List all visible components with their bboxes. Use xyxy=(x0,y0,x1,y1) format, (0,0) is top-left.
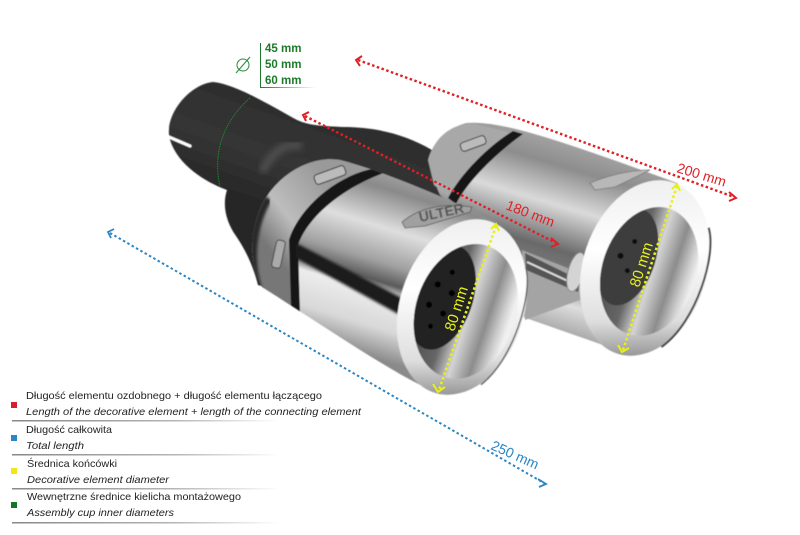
collar shadow xyxy=(253,198,268,290)
legend item: red xyxy=(11,390,362,422)
left tip tube xyxy=(252,158,498,385)
black band xyxy=(289,169,384,312)
arrow: left 80 mm xyxy=(433,224,499,392)
legend xyxy=(11,390,362,524)
legend item: blue: Total length xyxy=(26,440,84,452)
logo plates xyxy=(313,165,347,185)
legend item: red: Długość elementu ozdobnego + długość elementu łączącego xyxy=(26,390,322,402)
inlet diameters: 45 mm xyxy=(265,43,301,55)
reflection band xyxy=(296,243,405,314)
arrow: right 80 mm xyxy=(618,184,680,352)
right tip tube xyxy=(428,123,705,352)
inlet diameters: 50 mm xyxy=(265,59,301,71)
label: 180 mm: 180 mm xyxy=(504,197,557,230)
engraved logo xyxy=(402,206,472,228)
right tip face xyxy=(579,180,712,356)
label: 200 mm: 200 mm xyxy=(675,160,728,190)
arrow: 180 mm xyxy=(303,112,558,247)
left tip tube: ULTER xyxy=(417,200,465,225)
legend item: blue: Długość całkowita xyxy=(26,424,112,436)
inlet diameters: 60 mm xyxy=(265,75,301,87)
label: left 80 mm: 80 mm xyxy=(442,284,472,333)
legend item: green: Wewnętrzne średnice kielicha montażowego xyxy=(27,491,241,503)
collar xyxy=(255,158,354,306)
legend item: green: Assembly cup inner diameters xyxy=(26,507,175,519)
legend item: yellow: Średnica końcówki xyxy=(27,457,117,470)
left tip face xyxy=(396,218,528,396)
exhaust tip product image xyxy=(169,82,732,412)
inlet diameters xyxy=(265,43,301,87)
legend item: red: Length of the decorative element + length of the connecting element xyxy=(26,406,362,418)
green pipe diameter marker xyxy=(218,98,250,187)
engraved logo xyxy=(590,170,650,190)
green bracket xyxy=(260,43,316,88)
legend item: green xyxy=(11,491,280,524)
label: right 80 mm: 80 mm xyxy=(627,240,657,289)
bracket between tips xyxy=(522,250,589,320)
legend item: yellow xyxy=(11,457,280,490)
arrow: 250 mm xyxy=(108,229,546,487)
black inlet pipe and Y-connector xyxy=(169,82,445,290)
pipe slot xyxy=(169,137,190,146)
legend item: yellow: Decorative element diameter xyxy=(27,474,170,486)
logo plate xyxy=(459,135,487,152)
collar and band xyxy=(428,124,513,198)
diameter symbol xyxy=(236,57,250,73)
legend item: blue xyxy=(11,424,280,456)
label: 250 mm: 250 mm xyxy=(489,437,541,472)
arrow: 200 mm xyxy=(356,56,736,201)
